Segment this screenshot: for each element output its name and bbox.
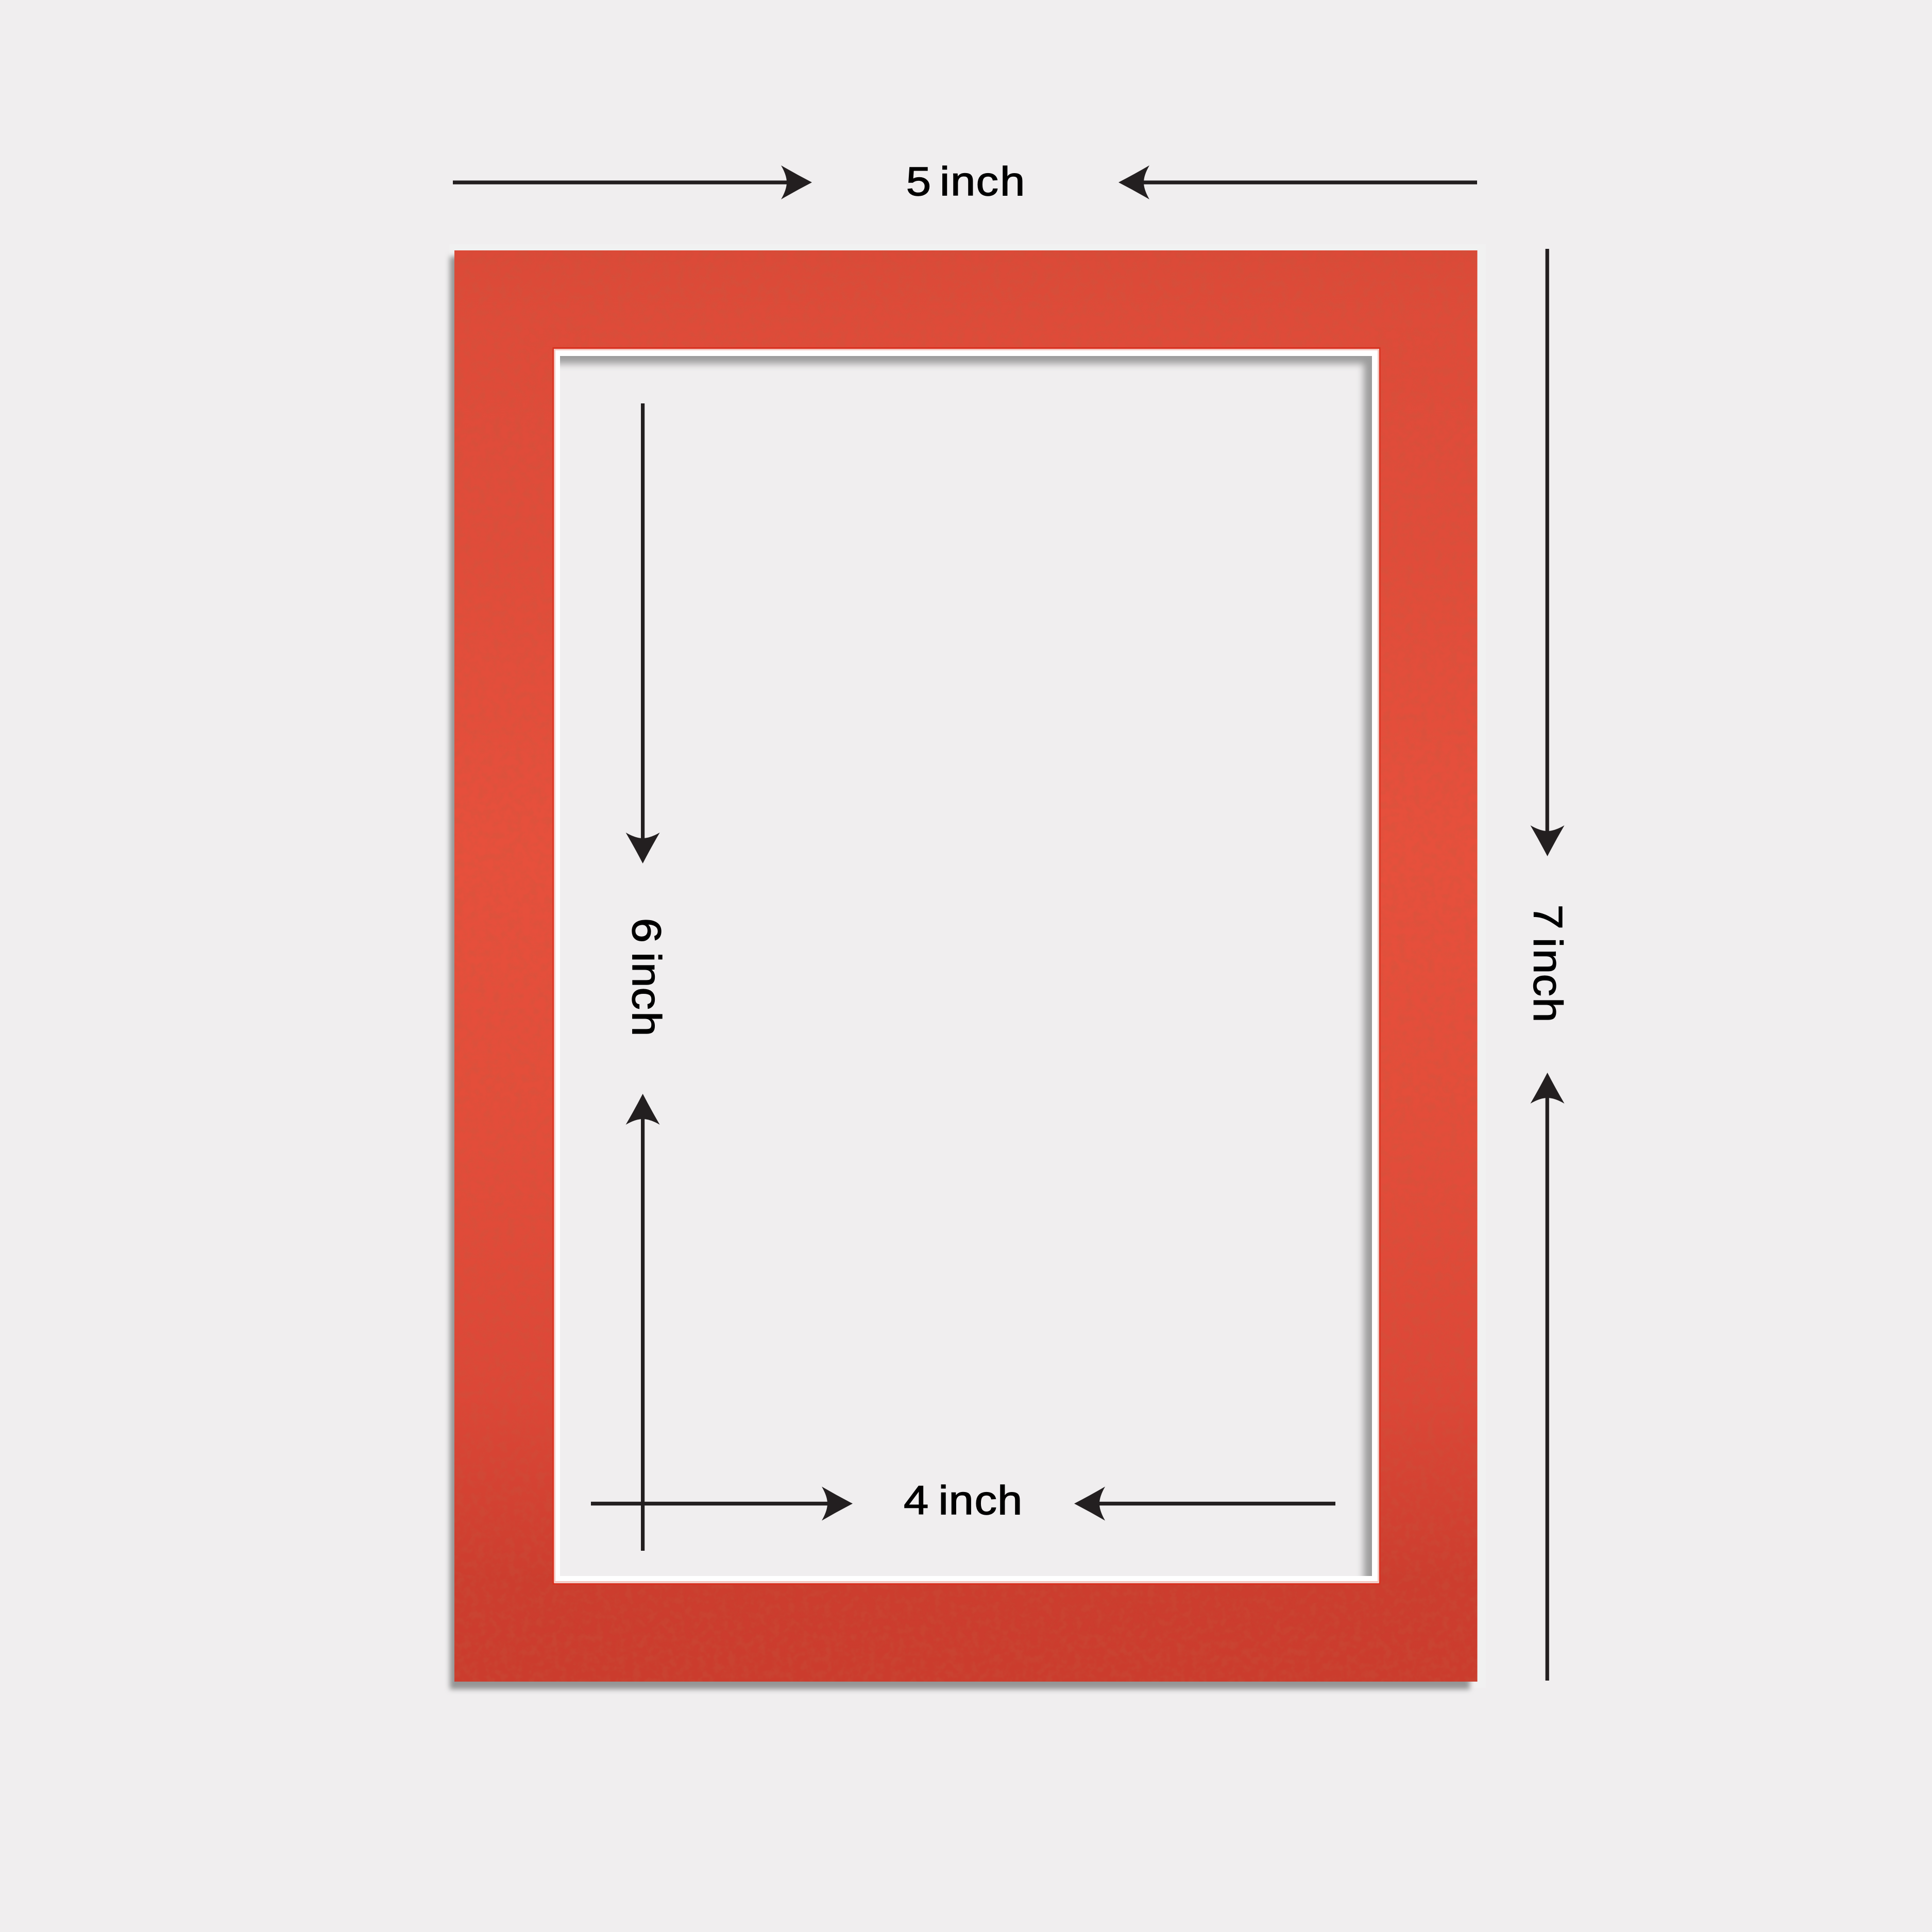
bevel red edge	[553, 348, 1380, 1584]
arrow: inner left, pointing down	[626, 403, 660, 863]
arrow: inner left, pointing up	[626, 1094, 660, 1551]
arrow: top left, pointing right	[453, 165, 812, 199]
label: 4 inch: 4 inch	[904, 1478, 1022, 1523]
white bevel	[555, 350, 1378, 1581]
arrow: inner bottom right, pointing left	[1074, 1487, 1335, 1521]
mat paper texture	[454, 642, 1478, 1158]
infographic canvas	[447, 165, 1564, 1693]
label: 5 inch: 5 inch	[906, 159, 1025, 204]
frame halo	[449, 244, 1486, 1688]
frame drop shadow	[450, 257, 1470, 1689]
bevel pale edge	[554, 349, 1379, 1582]
panel: photo mat frame	[449, 244, 1486, 1700]
label: 7 inch: 7 inch	[1525, 905, 1571, 1022]
arrow: outer right, pointing down	[1530, 249, 1564, 856]
arrow: outer right, pointing up	[1530, 1073, 1564, 1681]
arrow: top right, pointing left	[1118, 165, 1477, 199]
window opening	[554, 349, 1379, 1583]
bevel inner shadow	[560, 356, 1372, 1576]
label: 6 inch: 6 inch	[624, 918, 669, 1036]
arrow: inner bottom left, pointing right	[591, 1487, 853, 1521]
red mat board	[454, 250, 1478, 1682]
